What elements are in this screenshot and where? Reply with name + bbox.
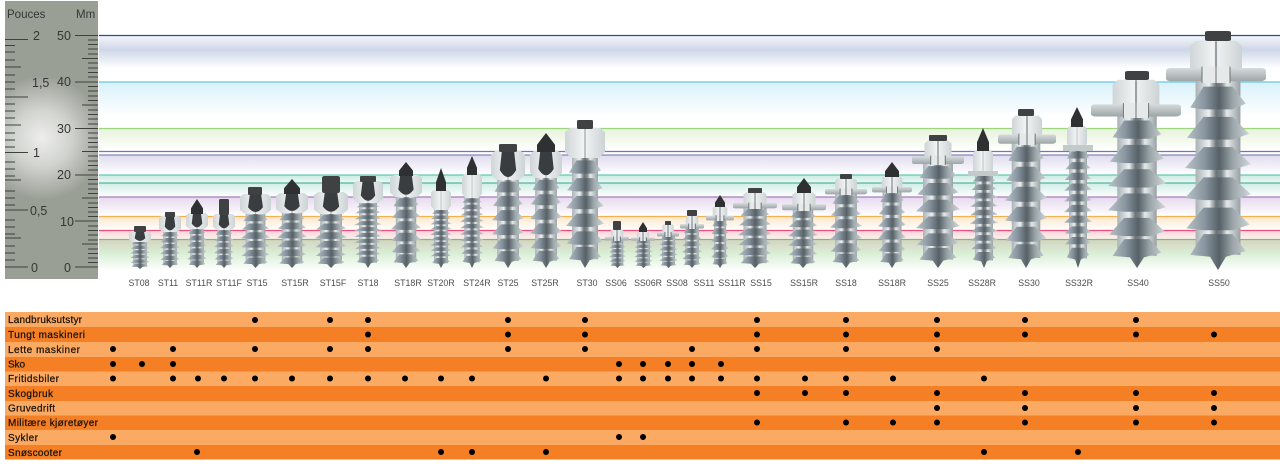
screw model labels: ST15F <box>320 278 347 288</box>
row: Skogbruk: Skogbruk <box>8 389 54 400</box>
screw: SS32R <box>1063 107 1093 268</box>
ruler numbers: 0 <box>31 261 38 275</box>
row: Sko: Sko <box>8 360 25 370</box>
screw: ST11F <box>213 199 235 268</box>
screw model labels: ST20R <box>427 278 455 288</box>
ruler numbers: 40 <box>57 75 71 89</box>
screw: SS11R <box>706 195 734 268</box>
row: Fritidsbiler <box>5 372 1280 386</box>
usage table <box>5 312 1280 460</box>
screw model labels: ST15 <box>246 278 268 288</box>
screw model labels: ST15R <box>281 278 309 288</box>
screw: ST15R <box>276 179 308 268</box>
row: Snøscooter: Snøscooter <box>8 448 63 459</box>
row: Landbruksutstyr: Landbruksutstyr <box>8 315 83 326</box>
screw model labels: SS50 <box>1208 278 1230 288</box>
row: Skogbruk <box>5 386 1280 401</box>
chart background bands <box>99 36 1280 271</box>
screw: ST30 <box>565 120 605 268</box>
screw model labels: SS30 <box>1018 278 1040 288</box>
screw: SS30 <box>998 109 1056 268</box>
screw: SS28R <box>968 128 998 268</box>
screw: SS06 <box>605 221 629 268</box>
screw model labels: ST30 <box>576 278 598 288</box>
screw model labels <box>128 278 1230 288</box>
screw model labels: SS06R <box>634 278 662 288</box>
ruler ticks <box>5 36 98 267</box>
screw model labels: SS08 <box>666 278 688 288</box>
size reference lines <box>99 36 1280 240</box>
screw model labels: SS25 <box>927 278 949 288</box>
screw model labels: SS28R <box>968 278 996 288</box>
screw: ST15 <box>240 187 271 268</box>
screw: ST25R <box>530 133 562 268</box>
ruler heading: inches: Pouces <box>7 9 46 21</box>
ruler heading: millimetres: Mm <box>76 9 95 21</box>
screw model labels: ST11R <box>186 278 212 288</box>
screw: SS06R <box>631 222 655 268</box>
screw model labels: ST18R <box>394 278 422 288</box>
row: Militære kjøretøyer: Militære kjøretøyer <box>8 418 99 429</box>
screw model labels: ST11F <box>216 278 242 288</box>
ruler numbers: 0,5 <box>30 204 47 218</box>
screw model labels: ST11 <box>158 278 178 288</box>
row: Landbruksutstyr <box>5 312 1280 327</box>
ruler numbers: 50 <box>57 29 71 43</box>
screw: ST24R <box>460 156 484 268</box>
screw model labels: SS06 <box>605 278 627 288</box>
row: Tungt maskineri <box>5 327 1280 342</box>
screw model labels: ST24R <box>463 278 491 288</box>
screw model labels: ST08 <box>128 278 150 288</box>
ruler numbers: 1 <box>33 146 40 160</box>
screw: SS15R <box>782 178 826 268</box>
row: Sykler: Sykler <box>8 433 39 444</box>
screw: ST15F <box>314 176 348 268</box>
screw model labels: ST25R <box>531 278 559 288</box>
row: Lette maskiner <box>5 342 1280 357</box>
screw model labels: SS40 <box>1127 278 1149 288</box>
ruler numbers: 1,5 <box>32 76 49 90</box>
ruler numbers: 0 <box>64 261 71 275</box>
screw: SS18 <box>825 174 867 268</box>
ruler numbers: 30 <box>57 122 71 136</box>
screw: SS15 <box>733 188 777 268</box>
screw model labels: SS32R <box>1065 278 1093 288</box>
ruler numbers: 2 <box>33 29 40 43</box>
row: Gruvedrift <box>5 401 1280 416</box>
screw: SS08 <box>657 221 679 268</box>
screw: ST25 <box>491 144 525 268</box>
screw: SS50 <box>1166 31 1266 270</box>
ruler numbers: 20 <box>57 168 71 182</box>
row: Lette maskiner: Lette maskiner <box>8 345 81 356</box>
ruler numbers: 10 <box>60 215 74 229</box>
screw model labels: ST25 <box>497 278 519 288</box>
row: Gruvedrift: Gruvedrift <box>8 404 55 414</box>
screw: SS11 <box>680 210 704 268</box>
screw: ST18R <box>390 162 422 268</box>
row: Sykler <box>5 430 1280 445</box>
screw model labels: SS11 <box>694 278 715 288</box>
screw model labels: ST18 <box>357 278 379 288</box>
screw: SS25 <box>912 135 964 268</box>
screw: SS18R <box>872 162 912 268</box>
screw model labels: SS18 <box>835 278 857 288</box>
screw model labels: SS18R <box>878 278 906 288</box>
ruler numbers <box>30 29 74 275</box>
row: Snøscooter <box>5 445 1280 460</box>
row: Militære kjøretøyer <box>5 416 1280 430</box>
ruler: inches and millimetres <box>5 1 98 279</box>
screw: ST18 <box>353 176 383 268</box>
screw model labels: SS15 <box>750 278 772 288</box>
screw: SS40 <box>1091 71 1181 268</box>
screw: ST20R <box>430 168 452 268</box>
screw model labels: SS11R <box>718 278 746 288</box>
row: Sko <box>5 357 1280 372</box>
screw model labels: SS15R <box>790 278 818 288</box>
screw: ST11 <box>159 212 181 268</box>
row: Fritidsbiler: Fritidsbiler <box>8 374 60 385</box>
row: Tungt maskineri: Tungt maskineri <box>8 330 85 341</box>
screw: ST08 <box>129 226 151 269</box>
screw: ST11R <box>186 199 208 268</box>
